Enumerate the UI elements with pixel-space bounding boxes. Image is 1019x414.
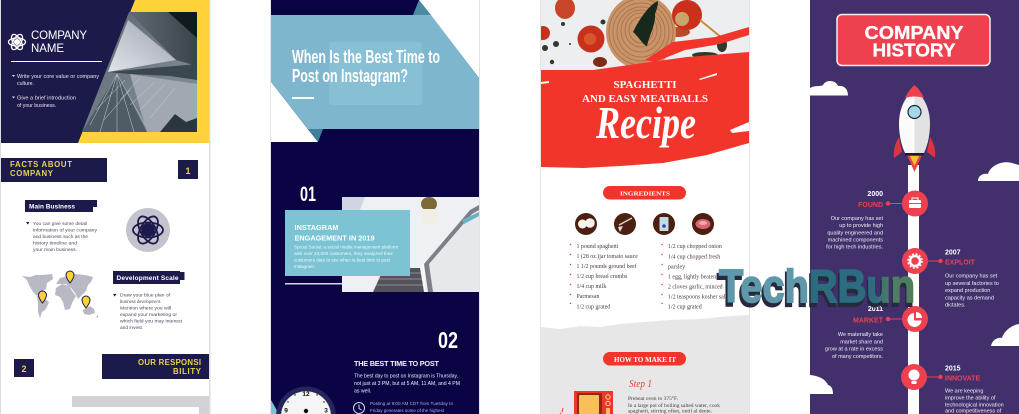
panel: instagram timing bbox=[271, 0, 479, 414]
best time text: as well. bbox=[354, 388, 371, 394]
sauce bbox=[555, 0, 575, 19]
ingredients list left: Parmesan bbox=[576, 294, 599, 300]
timeline node: 2007 exploit: EXPLOIT bbox=[945, 260, 976, 266]
best time text bbox=[354, 374, 460, 394]
banner title: When Is the Best Time to bbox=[292, 47, 440, 67]
number badge 1 bbox=[178, 160, 198, 179]
text: 2000: up to provide high bbox=[839, 223, 883, 229]
best time heading: THE BEST TIME TO POST bbox=[354, 359, 440, 368]
red sparks bbox=[560, 408, 563, 414]
number 02: 02 bbox=[438, 327, 458, 353]
text: 2000: quality engineered and bbox=[827, 230, 883, 236]
cover building photo bbox=[80, 12, 198, 132]
text: main business bbox=[26, 221, 98, 253]
posting note: Friday generates some of the highest bbox=[370, 408, 445, 413]
world map with pins bbox=[22, 271, 98, 318]
posting note bbox=[370, 401, 453, 413]
ingredients list left: 1 pound spaghetti bbox=[576, 244, 619, 250]
section heading: our responsibility bbox=[102, 354, 209, 379]
text: 2000 bbox=[826, 216, 883, 250]
timeline node: 2011 market bbox=[853, 306, 928, 332]
icon: atom bbox=[8, 33, 26, 51]
cover bullet text bbox=[12, 74, 99, 109]
pins bbox=[38, 271, 90, 308]
highlight box: Instagram. bbox=[294, 264, 315, 270]
panel: company profile bbox=[1, 0, 209, 414]
laptop screen bbox=[424, 205, 479, 292]
how to make it pill: HOW TO MAKE IT bbox=[614, 356, 676, 364]
watermark: TechRBun bbox=[717, 264, 914, 316]
icon: ground beef bbox=[692, 213, 714, 235]
number badge 2: 2 bbox=[21, 364, 27, 374]
spaghetti nest bbox=[606, 0, 676, 69]
text: 2007: Our company has set bbox=[945, 274, 998, 280]
icon: atom on gray circle bbox=[126, 208, 170, 252]
number badge 2 bbox=[14, 359, 34, 377]
panel: spaghetti recipe bbox=[536, 0, 749, 414]
best time text: not just at 3 PM, but at 5 AM, 11 AM, and 4 PM bbox=[354, 381, 460, 387]
section heading: facts about company bbox=[1, 158, 107, 182]
text: development scale: and invest. bbox=[120, 325, 143, 331]
banner title: SPAGHETTI bbox=[614, 80, 676, 91]
ingredients list right: 1/2 cup chopped onion bbox=[668, 244, 722, 250]
text: 2015 bbox=[945, 388, 1004, 414]
panel borders bbox=[209, 0, 210, 414]
cover bullet text: culture. bbox=[17, 81, 34, 87]
text: 2000: machined components bbox=[828, 238, 883, 244]
ingredients list right bbox=[661, 244, 727, 310]
food photo bbox=[536, 0, 749, 75]
ingredients pill: INGREDIENTS bbox=[620, 190, 670, 198]
text: main business: and business such as the bbox=[33, 234, 88, 240]
text: 2007: capacity as demand bbox=[945, 296, 994, 302]
section heading: our responsibility: OUR RESPONSI bbox=[138, 358, 201, 367]
text: 2000: Our company has set bbox=[831, 216, 883, 222]
text: development scale: Draw your blue plan of bbox=[120, 292, 171, 298]
panel: company history bbox=[810, 0, 1019, 414]
step text: Preheat oven to 375°F. bbox=[628, 395, 679, 402]
icon: small clock bbox=[354, 402, 364, 414]
banner inner photo tint bbox=[329, 42, 422, 105]
section heading: our responsibility: BILITY bbox=[173, 367, 202, 376]
timeline node: 2007 exploit: 2007 bbox=[945, 250, 961, 256]
highlight box: ENGAGEMENT IN 2019 bbox=[294, 234, 374, 242]
banner title bbox=[292, 47, 440, 86]
timeline node: 2007 exploit bbox=[902, 248, 976, 274]
teal corner bbox=[271, 400, 277, 414]
recipe script: Recipe bbox=[595, 97, 696, 148]
text: main business: You can give some detail bbox=[33, 221, 87, 227]
text: development scale: which field you may interest bbox=[120, 318, 183, 324]
timeline node: 2000 found: FOUND bbox=[858, 202, 883, 209]
icon: spoon of flour bbox=[614, 213, 636, 235]
light blue banner bbox=[271, 15, 479, 129]
title badge: HISTORY bbox=[872, 40, 956, 60]
navy background bbox=[271, 0, 479, 414]
ingredients list left: 1/2 cup grated bbox=[576, 304, 610, 310]
text: 2007 bbox=[945, 274, 999, 308]
banner title bbox=[582, 81, 708, 102]
text: 2011: market share and bbox=[840, 340, 883, 346]
laptop keyboard bbox=[373, 268, 424, 292]
ingredients list right: 1/2 teaspoons kosher salt bbox=[668, 294, 727, 300]
heading: development scale: Development Scale bbox=[116, 275, 179, 282]
cover title: COMPANY bbox=[31, 30, 87, 42]
clouds bbox=[810, 81, 1019, 394]
timeline node: 2015 innovate: INNOVATE bbox=[945, 376, 980, 382]
highlight box: with over 24,000 customers, they analyzed their bbox=[294, 251, 393, 257]
step heading: Step 1 bbox=[629, 378, 652, 390]
text: main business: information of your company bbox=[33, 228, 98, 234]
title badge: COMPANY bbox=[864, 22, 964, 43]
timeline node: 2000 found: 2000 bbox=[867, 191, 883, 198]
text: 2007: dictates. bbox=[945, 302, 966, 308]
timeline node: 2015 innovate bbox=[901, 364, 980, 390]
text: 2011 bbox=[825, 332, 883, 360]
number 01: 01 bbox=[300, 183, 316, 206]
text: 2011: We materially take bbox=[838, 332, 883, 338]
section heading: facts about company: FACTS ABOUT bbox=[10, 160, 72, 169]
red brush banner bbox=[541, 52, 749, 168]
ingredients list left bbox=[570, 244, 638, 310]
icon: wall clock bbox=[276, 386, 336, 414]
ingredients list right: parsley bbox=[668, 264, 685, 270]
ingredients list right: 1 egg, lightly beaten bbox=[668, 274, 716, 280]
text: 2015: technological innovation bbox=[945, 402, 1004, 408]
ingredients list right: 1/4 cup chopped fresh bbox=[668, 254, 720, 260]
plant bbox=[421, 197, 438, 224]
cover bullet text: of your business. bbox=[17, 103, 56, 109]
timeline trail bbox=[908, 165, 919, 414]
cover title: NAME bbox=[31, 43, 64, 55]
ingredients list left: 1 (28 oz.)jar tomato sauce bbox=[576, 253, 638, 260]
cover yellow background bbox=[1, 0, 209, 143]
number badge 1: 1 bbox=[185, 166, 191, 176]
heading: development scale bbox=[113, 271, 184, 284]
text: 2015: improve the ability of bbox=[945, 396, 996, 402]
text: main business: history timeline and bbox=[33, 240, 77, 246]
desk photo bbox=[342, 197, 479, 292]
icon: eggs bbox=[575, 213, 597, 235]
cover bullet text: Write your core value or company bbox=[17, 74, 99, 80]
banner title: Post on Instagram? bbox=[292, 66, 408, 86]
white corner top right bbox=[419, 0, 479, 78]
step text: In a large pot of boiling salted water, cook bbox=[628, 402, 720, 409]
section heading: facts about company: COMPANY bbox=[10, 169, 54, 178]
highlight box bbox=[285, 210, 410, 276]
text: 2007: expand production bbox=[945, 288, 990, 294]
icon: oven bbox=[574, 391, 613, 414]
text: development scale: business development. bbox=[120, 299, 161, 305]
highlight box: INSTAGRAM bbox=[294, 223, 338, 232]
text: development scale: Mention where you will bbox=[120, 306, 171, 312]
text: 2015: We are keeping bbox=[945, 388, 983, 394]
ingredients list left: 1/4 cup milk bbox=[576, 284, 606, 290]
watermark: TechRBun bbox=[719, 260, 915, 312]
timeline node: 2011 market: 2011 bbox=[868, 306, 883, 313]
white corner left bbox=[271, 82, 318, 142]
text: 2011: of many competitors. bbox=[832, 354, 883, 360]
icon: wall clock: 12 bbox=[302, 391, 310, 398]
title badge bbox=[837, 14, 990, 66]
timeline node: 2011 market: MARKET bbox=[853, 318, 884, 324]
highlight box: customers data to see when is best time to post bbox=[294, 258, 391, 264]
herbs bbox=[542, 20, 727, 64]
text: main business: your main business. bbox=[33, 247, 77, 253]
tomatoes bbox=[672, 0, 702, 30]
heading: main business bbox=[25, 200, 97, 212]
timeline node: 2015 innovate: 2015 bbox=[945, 366, 961, 372]
basil leaf bbox=[633, 1, 658, 46]
heading: main business: Main Business bbox=[29, 204, 75, 210]
ingredients list right: 1/2 cup grated bbox=[668, 304, 702, 310]
text: 2011: grow at a rate in excess bbox=[825, 346, 883, 352]
best time text: The best day to post on Instagram is Thursday, bbox=[354, 374, 458, 380]
teal accent top bbox=[413, 0, 431, 15]
icon: milk carton bbox=[653, 213, 675, 235]
cover navy shape bbox=[1, 0, 135, 143]
brush streak bbox=[645, 27, 749, 62]
torn gray section bbox=[541, 315, 749, 414]
ingredients list left: 1 1/2 pounds ground beef bbox=[576, 263, 637, 270]
text: 2000: for high tech industries. bbox=[826, 244, 883, 250]
ingredients list left: 1/2 cup bread crumbs bbox=[576, 274, 628, 280]
highlight box: Sprout Social, a social media management platform bbox=[294, 244, 398, 250]
text: 2007: up several factories to bbox=[945, 281, 999, 287]
how to make it pill bbox=[603, 352, 686, 366]
ingredients list right: 2 cloves garlic, minced bbox=[668, 284, 723, 290]
cover title bbox=[31, 30, 87, 55]
posting note: Posting at 9:00 AM CDT from Tuesday to bbox=[370, 401, 453, 406]
step text bbox=[628, 395, 720, 414]
gray frame at bottom bbox=[72, 396, 209, 414]
icon: rocket bbox=[894, 85, 935, 172]
text: development scale bbox=[113, 292, 183, 331]
teal accent bottom bbox=[308, 129, 323, 142]
timeline node: 2000 found bbox=[858, 190, 928, 216]
cover bullet text: Give a brief introduction bbox=[17, 96, 76, 102]
text: development scale: expand your marketing or bbox=[120, 312, 177, 318]
ingredients pill bbox=[603, 186, 686, 200]
white brush marks bbox=[541, 73, 749, 133]
banner title: AND EASY MEATBALLS bbox=[582, 94, 708, 105]
